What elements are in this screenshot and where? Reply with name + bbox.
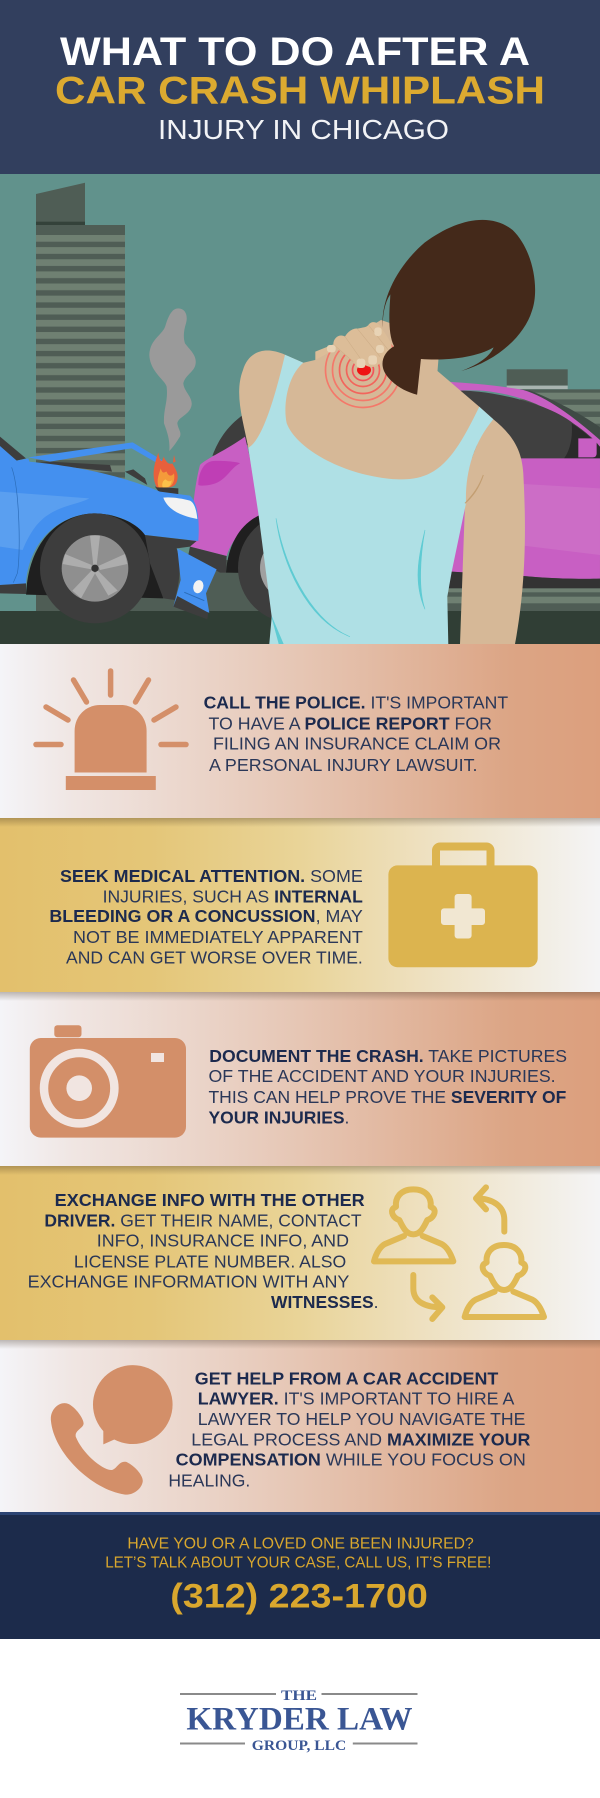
text: get help from a lawyer: HEALING. — [168, 1471, 250, 1491]
blue car — [0, 437, 217, 623]
right arm — [460, 419, 525, 644]
title line 1: WHAT TO DO AFTER A — [60, 30, 530, 74]
phone number: (312) 223-1700 — [170, 1578, 428, 1616]
call to action text: HAVE YOU OR A LOVED ONE BEEN INJURED? — [127, 1536, 474, 1553]
illustration: woman with whiplash after car crash — [0, 174, 600, 644]
text: document the crash: THIS CAN HELP PROVE THE SEVERITY OF — [208, 1087, 567, 1107]
text: exchange info: WITNESSES. — [271, 1292, 378, 1312]
text: exchange info: DRIVER. GET THEIR NAME, CONTACT — [44, 1210, 362, 1230]
logo: The Kryder Law Group, LLC: THE — [281, 1688, 317, 1704]
flame — [154, 453, 178, 487]
woman — [239, 220, 535, 644]
text: get help from a lawyer — [168, 1369, 531, 1491]
text: exchange info: EXCHANGE INFO WITH THE OTHER — [55, 1190, 365, 1210]
text: call the police: A PERSONAL INJURY LAWSUIT. — [209, 755, 478, 775]
call to action text — [105, 1536, 491, 1572]
text: get help from a lawyer: GET HELP FROM A CAR ACCIDENT — [195, 1369, 499, 1389]
text: seek medical attention: NOT BE IMMEDIATELY APPARENT — [73, 927, 363, 947]
text: seek medical attention: SEEK MEDICAL ATTENTION. SOME — [60, 866, 363, 886]
text: exchange info — [28, 1190, 378, 1312]
blue car wheel — [40, 513, 150, 623]
call to action text: LET’S TALK ABOUT YOUR CASE, CALL US, IT’S FREE! — [105, 1555, 491, 1572]
text: seek medical attention: AND CAN GET WORSE OVER TIME. — [66, 948, 363, 968]
title line 2: CAR CRASH WHIPLASH — [55, 70, 545, 112]
text: get help from a lawyer: LAWYER. IT'S IMPORTANT TO HIRE A — [198, 1388, 515, 1408]
text: call the police: FILING AN INSURANCE CLAIM OR — [213, 734, 501, 754]
text: get help from a lawyer: LAWYER TO HELP YOU NAVIGATE THE — [198, 1409, 525, 1429]
back and shoulders — [239, 320, 493, 520]
pink car — [188, 382, 600, 623]
text: call the police: CALL THE POLICE. IT'S IMPORTANT — [204, 693, 508, 713]
right background building — [507, 369, 600, 449]
text: seek medical attention: INJURIES, SUCH AS INTERNAL — [103, 886, 363, 906]
text: call the police: TO HAVE A POLICE REPORT FOR — [208, 714, 492, 734]
street and lower buildings — [0, 560, 600, 644]
panel: exchange info — [0, 1166, 600, 1340]
panel: seek medical attention — [0, 818, 600, 992]
tank top — [248, 355, 493, 644]
text: document the crash: OF THE ACCIDENT AND YOUR INJURIES. — [208, 1066, 556, 1086]
broken bumper — [173, 548, 217, 619]
text: exchange info: INFO, INSURANCE INFO, AND — [97, 1231, 349, 1251]
text: exchange info: EXCHANGE INFORMATION WITH ANY — [28, 1271, 350, 1291]
pain rings on neck — [326, 332, 400, 408]
logo: The Kryder Law Group, LLC — [180, 1688, 418, 1754]
hand — [315, 322, 392, 368]
title line 3: INJURY IN CHICAGO — [158, 114, 449, 145]
smoke — [149, 308, 196, 451]
text: get help from a lawyer: COMPENSATION WHILE YOU FOCUS ON — [176, 1450, 526, 1470]
text: document the crash: YOUR INJURIES. — [208, 1107, 349, 1127]
panel: call the police — [0, 644, 600, 818]
panel: get help from a lawyer — [0, 1340, 600, 1512]
pink car wheel — [238, 513, 348, 623]
logo: The Kryder Law Group, LLC: KRYDER LAW — [186, 1702, 412, 1738]
hair — [382, 220, 535, 395]
text: exchange info: LICENSE PLATE NUMBER. ALSO — [74, 1251, 346, 1271]
background skyscraper — [36, 183, 125, 485]
icon: two people exchanging info — [374, 1187, 544, 1319]
top seams — [272, 518, 425, 644]
icon: first aid kit — [388, 846, 538, 967]
text: call the police — [204, 693, 508, 775]
text: document the crash: DOCUMENT THE CRASH. TAKE PICTURES — [209, 1046, 567, 1066]
text: seek medical attention: BLEEDING OR A CONCUSSION , MAY — [49, 906, 363, 926]
icon: camera — [30, 1025, 186, 1138]
text: seek medical attention — [49, 866, 363, 968]
panel: document the crash — [0, 992, 600, 1166]
icon: phone and speech bubble — [51, 1365, 173, 1495]
icon: police siren — [36, 671, 186, 790]
text: document the crash — [208, 1046, 567, 1127]
header panel — [0, 0, 600, 174]
logo: The Kryder Law Group, LLC: GROUP, LLC — [252, 1738, 346, 1754]
text: get help from a lawyer: LEGAL PROCESS AND MAXIMIZE YOUR — [191, 1430, 531, 1450]
call to action panel — [0, 1512, 600, 1639]
